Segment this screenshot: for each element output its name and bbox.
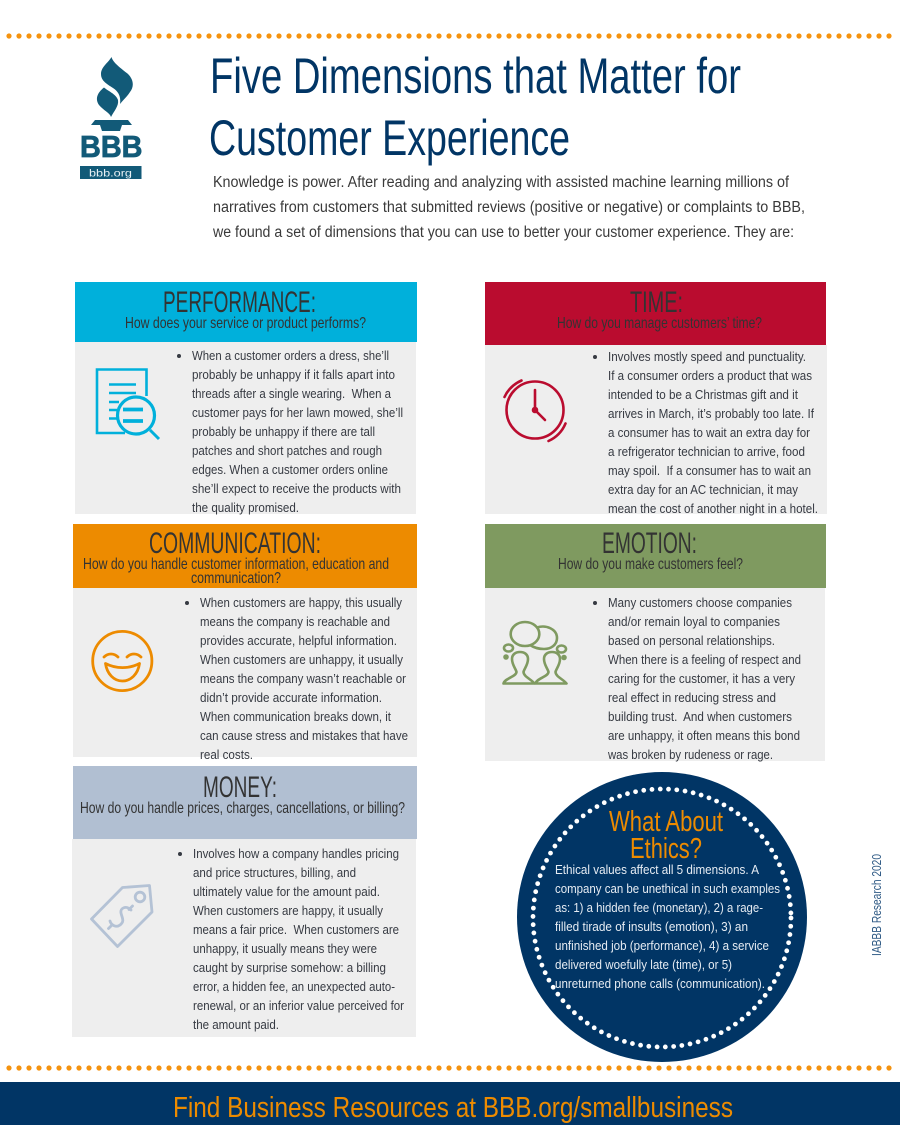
time text: Involves mostly speed and punctuality. <box>608 349 806 364</box>
emotion text: caring for the customer, it has a very <box>608 671 795 686</box>
logo: BBB torch: bbb.org <box>89 168 132 180</box>
title: Customer Experience <box>209 110 570 166</box>
performance text: edges. When a customer orders online <box>192 462 388 477</box>
time text: arrives in March, it’s probably too late. If <box>608 406 814 421</box>
time text: a refrigerator technician to arrive, food <box>608 444 805 459</box>
communication text: When customers are unhappy, it usually <box>200 652 403 667</box>
intro text: Knowledge is power. After reading and analyzing with assisted machine learning millions of <box>213 174 790 191</box>
ethics heading <box>609 806 723 865</box>
panel: time <box>485 282 827 516</box>
emotion text: are unhappy, it often means this bond <box>608 728 800 743</box>
footer banner: Find Business Resources at BBB.org/smallbusiness <box>173 1092 733 1124</box>
icon: clock <box>504 380 566 441</box>
money text: ultimately value for the amount paid. <box>193 884 380 899</box>
ethics text: company can be unethical in such examples <box>555 881 780 896</box>
intro text: we found a set of dimensions that you can use to better your customer experience. They are: <box>212 224 794 241</box>
ethics text: unfinished job (performance), 4) a service <box>555 938 769 953</box>
time text: If a consumer orders a product that was <box>608 368 812 383</box>
money text: unhappy, it usually means they were <box>193 941 377 956</box>
icon: smiling face <box>93 631 152 691</box>
logo: BBB torch <box>80 57 142 180</box>
ethics text: filled tirade of insults (emotion), 3) an <box>555 919 748 934</box>
ethics text: as: 1) a hidden fee (monetary), 2) a rage- <box>555 900 763 915</box>
communication text: didn’t provide accurate information. <box>200 690 382 705</box>
emotion text: real effect in reducing stress and <box>608 690 776 705</box>
time question: How do you manage customers’ time? <box>557 315 762 332</box>
icon: document with magnifier <box>97 370 159 439</box>
ethics heading: What About <box>609 806 723 838</box>
time text: a consumer has to wait an extra day for <box>608 425 811 440</box>
performance text: probably be unhappy if there are tall <box>192 424 375 439</box>
emotion heading: EMOTION: <box>602 527 697 560</box>
communication text: means the company wasn’t reachable or <box>200 671 407 686</box>
emotion text: based on personal relationships. <box>608 633 775 648</box>
performance text: customer pays for her lawn mowed, she’ll <box>192 405 403 420</box>
emotion text: When there is a feeling of respect and <box>608 652 801 667</box>
emotion text: and/or remain loyal to companies <box>608 614 780 629</box>
performance text <box>177 348 403 515</box>
panel: money <box>72 766 417 1037</box>
emotion text <box>593 595 801 762</box>
icon: two people talking <box>504 622 566 684</box>
emotion question: How do you make customers feel? <box>558 556 743 573</box>
money text: Involves how a company handles pricing <box>193 846 399 861</box>
money text <box>178 846 405 1032</box>
title <box>209 48 741 166</box>
communication text: means the company is reachable and <box>200 614 390 629</box>
time heading: TIME: <box>630 286 683 319</box>
performance text: threads after a single wearing. When a <box>192 386 392 401</box>
time text: may spoil. If a consumer has to wait an <box>608 463 811 478</box>
emotion text: Many customers choose companies <box>608 595 792 610</box>
money heading: MONEY: <box>203 771 277 804</box>
time text: extra day for an AC technician, it may <box>608 482 798 497</box>
time text: intended to be a Christmas gift and it <box>608 387 798 402</box>
money question: How do you handle prices, charges, cancellations, or billing? <box>80 800 405 817</box>
performance text: probably be unhappy if it falls apart into <box>192 367 395 382</box>
emotion text: was broken by rudeness or rage. <box>607 747 773 762</box>
logo: BBB torch: BBB <box>80 129 142 164</box>
ethics text: unreturned phone calls (communication). <box>555 976 765 991</box>
title: Five Dimensions that Matter for <box>210 48 741 104</box>
performance text: she’ll expect to receive the products with <box>192 481 401 496</box>
performance heading: PERFORMANCE: <box>163 286 316 319</box>
performance question: How does your service or product performs? <box>125 315 366 332</box>
money text: When customers are happy, it usually <box>193 903 383 918</box>
ethics text: Ethical values affect all 5 dimensions. A <box>555 862 759 877</box>
time text <box>593 349 818 516</box>
time text: mean the cost of another night in a hotel. <box>608 501 818 516</box>
emotion text: building trust. And when customers <box>608 709 792 724</box>
communication text: When communication breaks down, it <box>200 709 391 724</box>
research credit: IABBB Research 2020 <box>869 854 884 956</box>
intro text <box>212 174 805 241</box>
performance text: the quality promised. <box>192 500 299 515</box>
callout: what about ethics <box>517 772 807 1062</box>
ethics heading: Ethics? <box>630 833 702 865</box>
communication text: can cause stress and mistakes that have <box>200 728 408 743</box>
communication heading: COMMUNICATION: <box>149 527 321 560</box>
panel: emotion <box>485 524 826 762</box>
panel: performance <box>75 282 417 515</box>
performance text: When a customer orders a dress, she’ll <box>192 348 389 363</box>
money text: and price structures, billing, and <box>193 865 356 880</box>
communication question: How do you handle customer information, education and <box>83 556 389 573</box>
footer banner <box>0 1082 900 1125</box>
money text: means a fair price. When customers are <box>193 922 399 937</box>
panel: communication <box>73 524 417 762</box>
communication text <box>185 595 408 762</box>
ethics text: delivered woefully late (time), or 5) <box>555 957 732 972</box>
money text: the amount paid. <box>193 1017 279 1032</box>
performance text: patches and short patches and rough <box>192 443 382 458</box>
icon: price tag <box>92 886 152 946</box>
communication text: provides accurate, helpful information. <box>200 633 397 648</box>
communication text: real costs. <box>200 747 253 762</box>
money text: error, a hidden fee, an unexpected auto- <box>193 979 395 994</box>
money text: renewal, or an inferior value perceived for <box>193 998 405 1013</box>
intro text: narratives from customers that submitted reviews (positive or negative) or complaints to BBB, <box>213 199 805 216</box>
ethics text <box>555 862 780 991</box>
money text: caught by surprise somehow: a billing <box>193 960 386 975</box>
communication text: When customers are happy, this usually <box>200 595 402 610</box>
communication question <box>83 556 389 587</box>
communication question: communication? <box>191 570 281 587</box>
